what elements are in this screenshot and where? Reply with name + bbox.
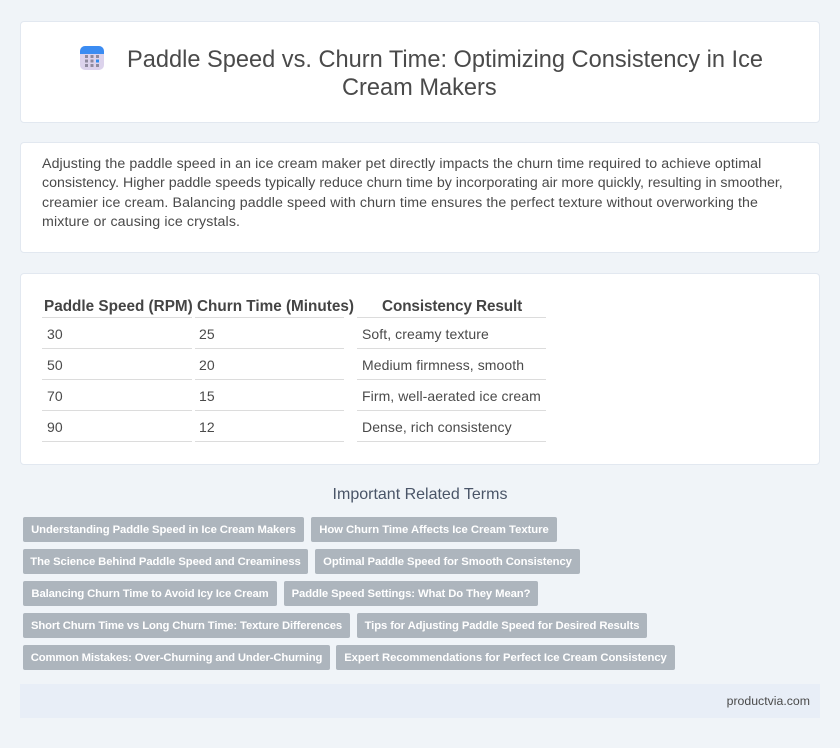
table header [44,298,522,315]
title: Paddle Speed vs. Churn Time: Optimizing Consistency in Ice [127,47,763,73]
intro paragraph: Adjusting the paddle speed in an ice cream maker pet directly impacts the churn time required to achieve optimal [42,156,761,172]
tag: Common Mistakes: Over-Churning and Under-Churning [31,652,322,664]
table header: Paddle Speed (RPM) [44,298,193,315]
tag: Understanding Paddle Speed in Ice Cream Makers [31,524,296,536]
tag [315,549,580,574]
title: Cream Makers [342,75,497,101]
intro paragraph: creamier ice cream. Balancing paddle speed with churn time ensures the perfect texture without overworking the [42,195,758,211]
tag [23,517,304,542]
row 30 rpm: 25 [199,326,215,342]
tag: Expert Recommendations for Perfect Ice Cream Consistency [344,652,667,664]
intro paragraph [42,156,783,230]
row 70 rpm: 70 [47,388,63,404]
row 90 rpm: 90 [47,419,63,435]
tag: Paddle Speed Settings: What Do They Mean? [292,588,530,600]
row 50 rpm: Medium firmness, smooth [362,357,524,373]
tag: Optimal Paddle Speed for Smooth Consistency [323,556,572,568]
tag: Tips for Adjusting Paddle Speed for Desired Results [365,620,639,632]
row 30 rpm: Soft, creamy texture [362,326,489,342]
related terms tags [23,517,675,670]
tag [336,645,675,670]
tag [23,645,330,670]
table header: Churn Time (Minutes) [197,298,354,315]
footer source: productvia.com [727,694,810,708]
tag: How Churn Time Affects Ice Cream Texture [319,524,549,536]
panel: table [20,273,820,465]
row 90 rpm [47,419,512,435]
row 90 rpm: 12 [199,419,215,435]
tag [357,613,647,638]
table header: Consistency Result [382,298,522,315]
row 70 rpm: Firm, well-aerated ice cream [362,388,541,404]
tag [23,549,308,574]
intro paragraph: consistency. Higher paddle speeds typically reduce churn time by incorporating air more quickly, resulting in smoother, [42,175,783,191]
tag [23,581,277,606]
related terms heading: Important Related Terms [333,486,507,503]
tag [23,613,350,638]
header panel [20,21,820,123]
row 50 rpm [47,357,524,373]
row 70 rpm [47,388,541,404]
tag [311,517,557,542]
tag [284,581,538,606]
row 30 rpm: 30 [47,326,63,342]
tag: The Science Behind Paddle Speed and Creaminess [30,556,301,568]
tag: Balancing Churn Time to Avoid Icy Ice Cream [31,588,269,600]
row 50 rpm: 50 [47,357,63,373]
intro paragraph: mixture or causing ice crystals. [42,214,240,230]
data table [42,298,546,442]
icon: calendar [80,46,104,70]
panel: intro text [20,142,820,253]
row 70 rpm: 15 [199,388,215,404]
row 30 rpm [47,326,489,342]
footer bar [20,684,820,718]
title [127,47,763,101]
row 90 rpm: Dense, rich consistency [362,419,512,435]
row 50 rpm: 20 [199,357,215,373]
tag: Short Churn Time vs Long Churn Time: Texture Differences [31,620,342,632]
